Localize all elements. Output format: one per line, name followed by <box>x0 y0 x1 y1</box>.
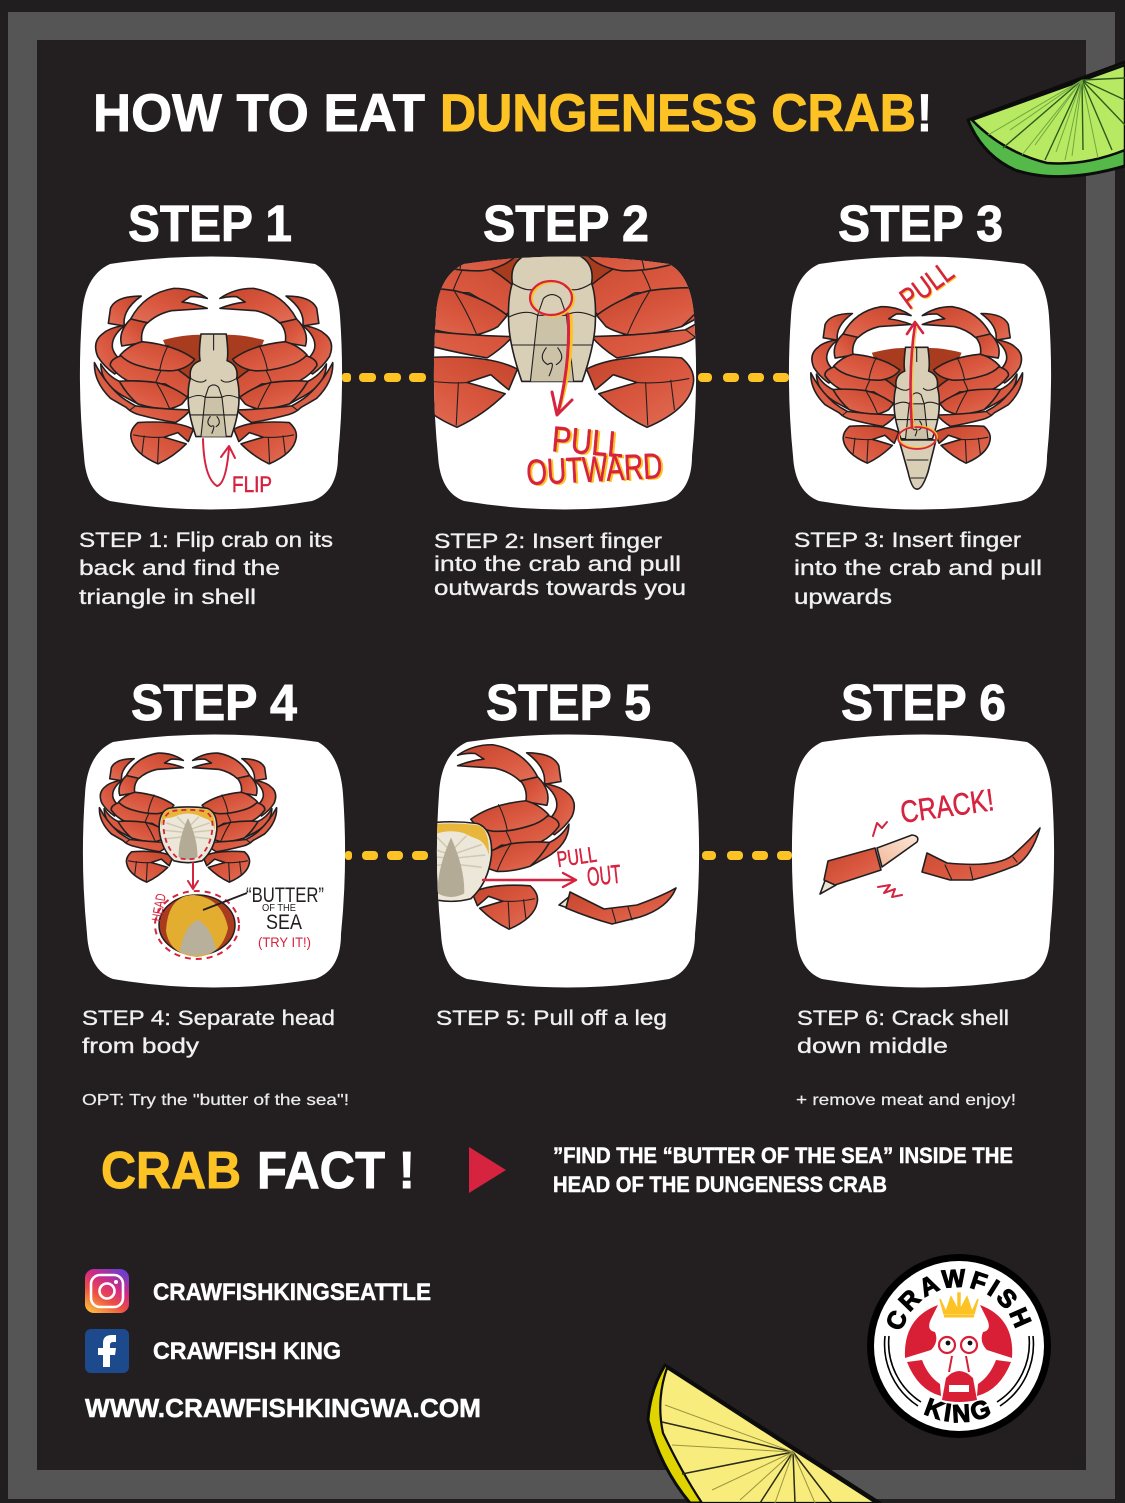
illustration card: pull outward <box>434 256 696 510</box>
connector: step 1 to 2 <box>342 373 426 382</box>
panel: step 2 <box>434 204 696 600</box>
crab fact callout: FACT ! <box>257 1142 415 1200</box>
illustration card: pull outward: PULL <box>552 419 628 466</box>
website: WWW.CRAWFISHKINGWA.COM <box>85 1393 481 1423</box>
illustration card: flip crab <box>80 256 342 510</box>
facebook name: CRAWFISH KING <box>153 1338 341 1365</box>
panel: step 5 <box>436 684 700 1030</box>
illustration card: pull upward: PULL <box>895 257 961 317</box>
crab fact callout <box>101 1142 1013 1200</box>
illustration card: pull outward: OUTWARD <box>527 446 665 494</box>
illustration: lime wedge <box>968 62 1125 177</box>
social links <box>85 1269 481 1423</box>
heading: step 4: STEP 4 <box>131 674 298 731</box>
illustration card: separate head: SEA <box>266 911 302 934</box>
heading: step 3: STEP 3 <box>838 195 1003 252</box>
heading: step 6: STEP 6 <box>841 674 1006 731</box>
crab fact text: HEAD OF THE DUNGENESS CRAB <box>553 1172 887 1197</box>
description: step 2: STEP 2: Insert finger <box>434 530 662 553</box>
panel: step 4 <box>82 674 349 1109</box>
illustration card: pull off a leg: PULL <box>555 842 598 872</box>
illustration card: pull outward: OUTWARD <box>525 445 663 493</box>
connector: step 4 to 5 <box>345 851 428 860</box>
description: step 4: OPT: Try the "butter of the sea"! <box>82 1092 349 1109</box>
illustration card: separate head: (TRY IT!) <box>258 934 311 950</box>
panel: step 3 <box>789 195 1051 609</box>
illustration card: crack shell <box>792 734 1054 988</box>
heading: step 5: STEP 5 <box>486 674 651 731</box>
description: step 3 <box>794 529 1042 609</box>
description: step 1: STEP 1: Flip crab on its <box>79 529 333 552</box>
illustration card: separate head: HEAD <box>148 892 169 923</box>
logo: crawfish king <box>867 1254 1051 1438</box>
illustration: lemon wedge <box>648 1365 880 1503</box>
illustration card: separate head: “BUTTER” <box>246 884 324 907</box>
description: step 3: STEP 3: Insert finger <box>794 529 1021 552</box>
heading: step 1: STEP 1 <box>128 195 292 252</box>
connector: step 5 to 6 <box>702 851 792 860</box>
title: ! <box>917 84 932 143</box>
crab fact callout: CRAB <box>101 1142 241 1200</box>
illustration card: pull off a leg: OUT <box>585 859 623 892</box>
description: step 3: into the crab and pull <box>794 557 1042 580</box>
crab fact text: ”FIND THE “BUTTER OF THE SEA” INSIDE THE <box>553 1143 1013 1168</box>
description: step 4 <box>82 1007 349 1109</box>
illustration card: pull upward: PULL <box>894 256 960 316</box>
description: step 6: STEP 6: Crack shell <box>797 1007 1009 1030</box>
description: step 1: back and find the <box>79 557 280 580</box>
description: step 6: down middle <box>797 1035 948 1058</box>
logo: crawfish king: KING <box>924 1398 990 1423</box>
logo: crawfish king: CRAWFISH <box>887 1268 1032 1330</box>
description: step 5: STEP 5: Pull off a leg <box>436 1007 667 1030</box>
description: step 4: STEP 4: Separate head <box>82 1007 335 1030</box>
description: step 4: from body <box>82 1035 200 1058</box>
title: HOW TO EAT <box>93 84 425 143</box>
illustration card: pull outward: PULL <box>550 418 626 465</box>
illustration card: flip crab: FLIP <box>232 472 272 497</box>
panel: step 6 <box>792 674 1054 1109</box>
description: step 2: outwards towards you <box>434 577 686 600</box>
illustration card: pull upward <box>789 256 1051 510</box>
description: step 6 <box>796 1007 1016 1109</box>
panel: step 1 <box>79 195 342 609</box>
title <box>93 84 932 143</box>
title: DUNGENESS CRAB <box>440 84 916 143</box>
icon: red arrow <box>469 1147 506 1193</box>
icon: instagram <box>85 1269 129 1313</box>
description: step 2 <box>434 530 686 600</box>
illustration card: separate head: OF THE <box>262 903 296 914</box>
illustration card: crack shell: CRACK! <box>898 782 996 830</box>
illustration card: pull off a leg <box>410 734 699 988</box>
description: step 1 <box>79 529 333 609</box>
illustration card: separate head <box>83 734 345 988</box>
description: step 1: triangle in shell <box>79 586 256 609</box>
instagram handle: CRAWFISHKINGSEATTLE <box>153 1279 431 1306</box>
icon: facebook <box>85 1329 129 1373</box>
heading: step 2: STEP 2 <box>483 195 649 252</box>
crab fact text <box>553 1143 1013 1197</box>
description: step 2: into the crab and pull <box>434 553 681 576</box>
description: step 6: + remove meat and enjoy! <box>796 1092 1016 1109</box>
connector: step 2 to 3 <box>698 373 789 382</box>
description: step 3: upwards <box>794 586 892 609</box>
